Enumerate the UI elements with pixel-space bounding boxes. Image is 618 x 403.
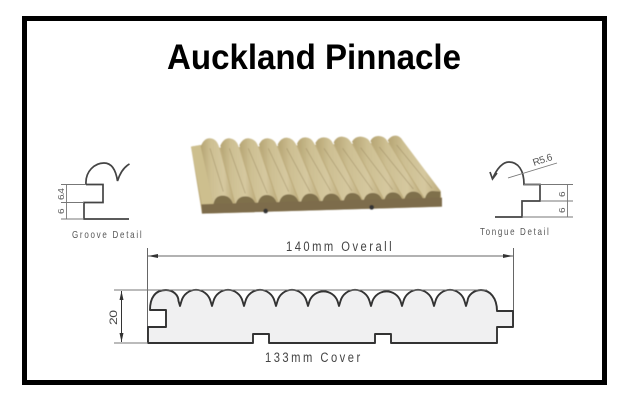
title: Auckland Pinnacle: [167, 38, 461, 77]
right arrow: [503, 254, 513, 258]
tongue dimension top: 6: [558, 191, 567, 197]
height label: 20: [107, 310, 120, 325]
board profile: [148, 290, 513, 343]
cover dimension label: 133mm Cover: [265, 350, 360, 365]
tongue radius leader: [508, 163, 573, 217]
tongue radius label: R5.6: [532, 152, 554, 169]
groove dimension number lower: 6: [57, 208, 66, 214]
groove detail caption: Groove Detail: [72, 229, 142, 240]
overall dimension label: 140mm Overall: [286, 239, 392, 254]
overall dimension: [148, 248, 514, 343]
height dimension: [114, 290, 487, 343]
board cross-section: [148, 290, 513, 344]
tongue dimension bottom: 6: [558, 207, 567, 213]
left arrow: [148, 254, 158, 258]
groove dimension numbers: 6.4: [57, 188, 66, 200]
product photo: wood panel: [191, 136, 442, 214]
tongue detail caption: Tongue Detail: [480, 226, 549, 237]
arrows: [120, 291, 124, 342]
groove outline: [84, 163, 130, 219]
notches cover: [149, 311, 390, 344]
groove dimension lines: [61, 184, 86, 219]
groove detail: [61, 163, 130, 219]
tongue outline: [490, 162, 540, 217]
tongue detail: [490, 162, 573, 217]
